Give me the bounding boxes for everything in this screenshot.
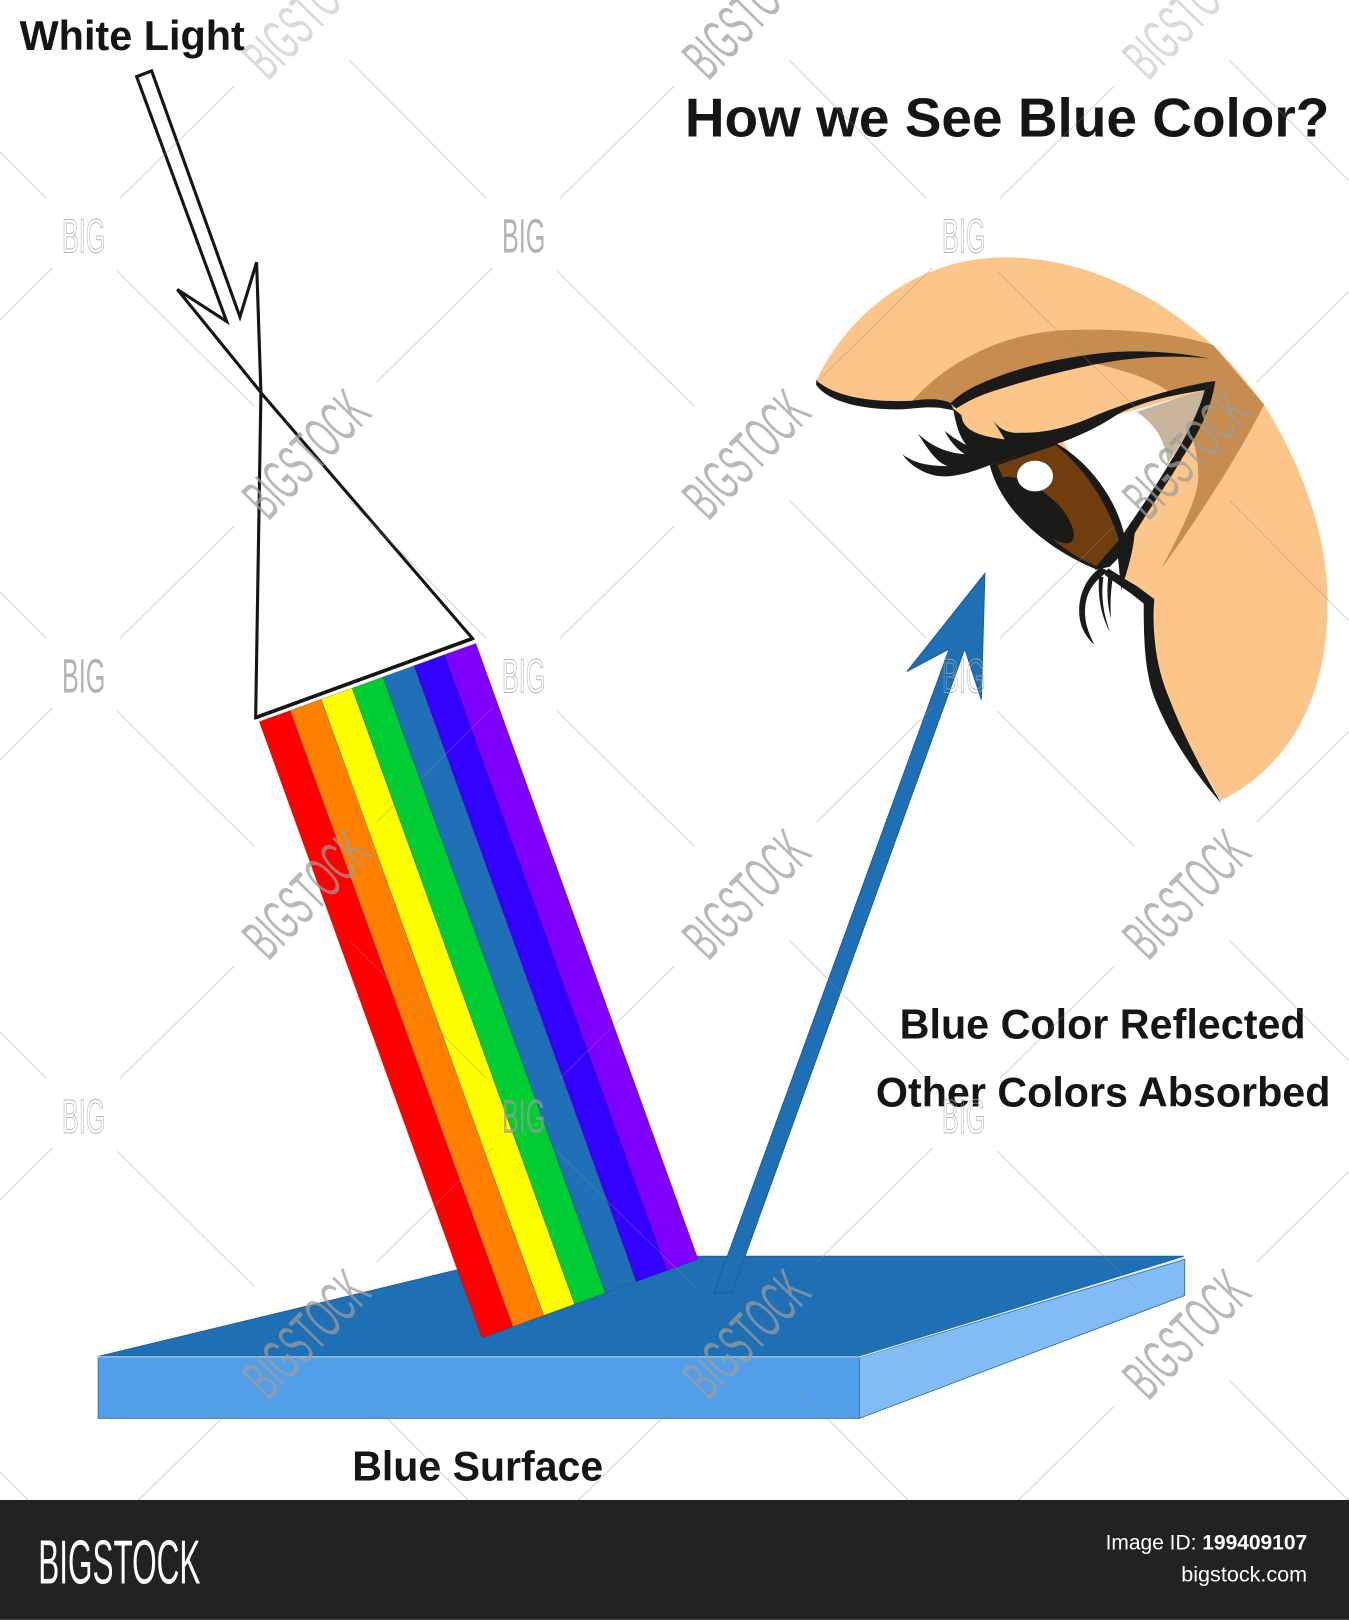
watermark tiles: BIG [502,1090,545,1144]
label: blue surface: Blue Surface [352,1443,603,1489]
band: orange [290,699,544,1327]
image id: Image ID: 199409107 [1106,1532,1307,1555]
watermark tiles: BIGSTOCK [671,1259,822,1411]
skin and brow shadow [816,257,1328,801]
surface side face [859,1259,1185,1418]
footer logo: BIGSTOCK [38,1529,200,1598]
eyelid crease [950,351,1209,408]
label: other colors absorbed: Other Colors Absorbed [876,1069,1330,1115]
rainbow spectrum bands [259,643,698,1338]
watermark tiles: BIG [62,1090,105,1144]
band: indigo [414,655,667,1282]
nose bridge line [1105,568,1221,803]
iris outline [990,443,1125,569]
label: white light: White Light [20,13,245,59]
surface front face [98,1357,859,1418]
arrow: reflected blue light [714,573,985,1293]
lower lashes [1079,567,1113,645]
heading: title: How we See Blue Color? [685,87,1329,149]
watermark tiles: BIG [62,650,105,704]
surface edge highlight [98,1258,1184,1357]
iris [997,445,1119,566]
site address: bigstock.com [1181,1562,1307,1587]
upper lid and lashes [902,381,1215,476]
watermark tiles: BIGSTOCK [671,819,822,971]
watermark tiles: BIG [942,650,985,704]
icon: eye and face profile [816,257,1328,803]
band: yellow [321,688,575,1315]
pupil [1000,477,1074,543]
panel: blue surface [98,1256,1185,1418]
band: blue [383,666,636,1293]
watermark tiles [62,0,1262,1411]
watermark tiles: BIGSTOCK [671,379,822,531]
eyelid skin [955,362,1171,440]
band: violet [445,643,698,1270]
tear duct shade [1136,390,1206,463]
watermark tiles: BIGSTOCK [231,819,382,971]
arrow: white light incoming [137,71,261,392]
watermark tiles: BIG [942,210,985,264]
watermark tiles: BIG [942,1090,985,1144]
band: red [259,711,513,1338]
band: green [352,677,606,1304]
surface top face [98,1256,1184,1356]
watermark tiles: BIGSTOCK [231,1259,382,1411]
eye highlight [1017,461,1053,491]
label: blue color reflected: Blue Color Reflected [900,1001,1306,1047]
watermark tiles: BIG [502,210,545,264]
brow outline [816,380,954,410]
footer bar [0,1500,1349,1620]
eyeball and eyelid [902,351,1215,590]
outer lid line [1095,381,1215,590]
sclera [1063,390,1205,537]
prism: white light beam triangle [256,393,473,718]
watermark tiles: BIGSTOCK [231,379,382,531]
watermark tiles: BIG [502,650,545,704]
brow, lashes and nose lines [816,380,1221,803]
watermark tiles: BIG [62,210,105,264]
